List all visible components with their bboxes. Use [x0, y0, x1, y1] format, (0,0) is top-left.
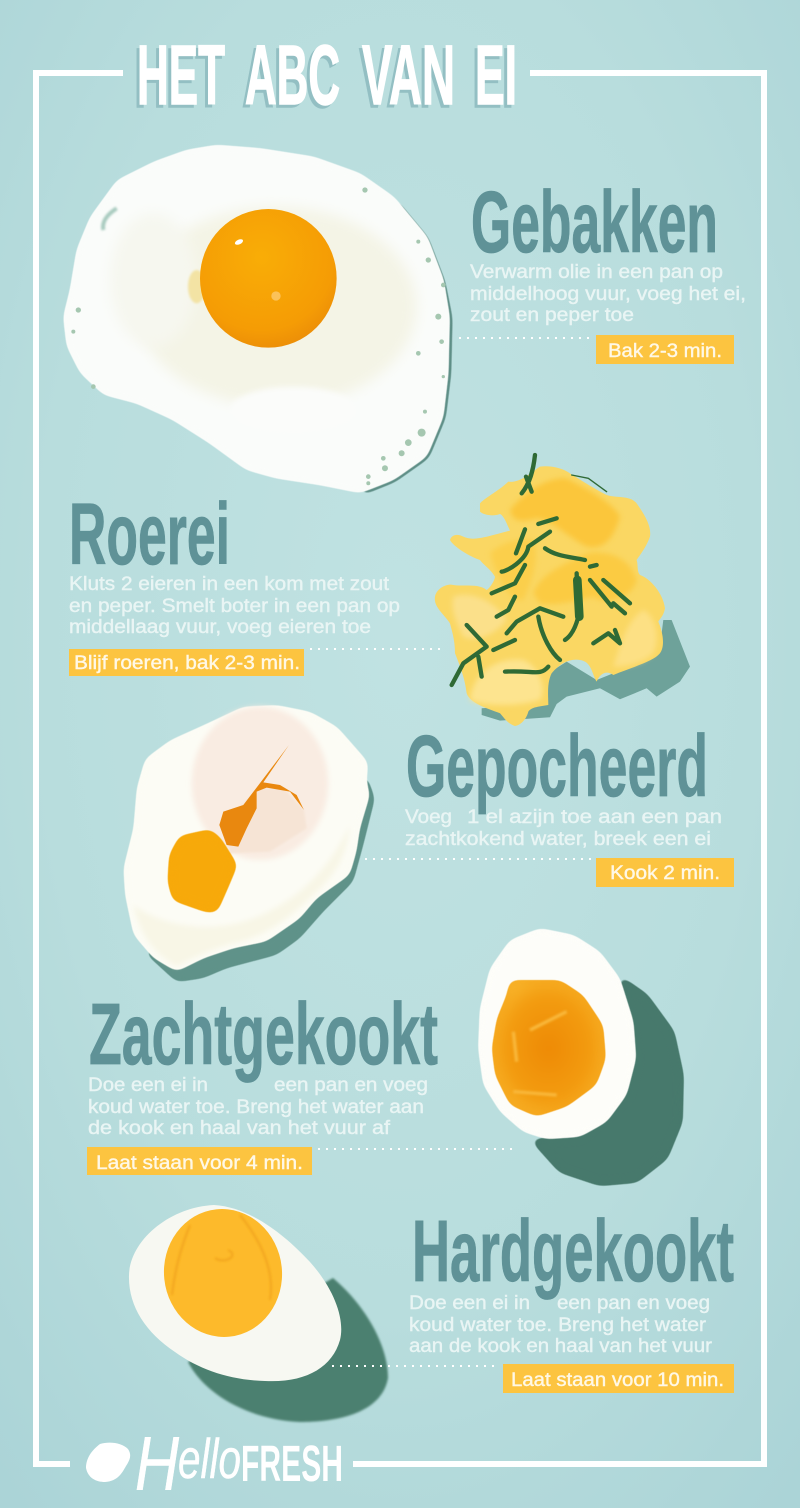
text: Hardgekookt instructions [409, 1292, 713, 1357]
text: Hardgekookt instructions: een pan en voeg [557, 1292, 710, 1314]
logo: HelloFRESH: H [135, 1422, 179, 1507]
hard yolk [158, 1203, 288, 1343]
text: Hardgekookt instructions: aan de kook en haal van het vuur [409, 1335, 713, 1357]
photo: scrambled eggs [435, 455, 690, 726]
dotted leader: Gepocheerd [365, 858, 594, 860]
text: Gebakken instructions [470, 261, 746, 326]
herbs [452, 455, 630, 685]
title: VAN [362, 28, 455, 122]
text: Zachtgekookt instructions: koud water toe. Breng het water aan [88, 1096, 424, 1118]
title: HET [137, 28, 225, 122]
text: Gebakken instructions: zout en peper toe [470, 304, 634, 326]
label: Blijf roeren: Blijf roeren, bak 2-3 min. [74, 652, 300, 674]
text: Roerei instructions [69, 573, 400, 638]
text: Zachtgekookt instructions: een pan en voeg [274, 1074, 428, 1096]
logo: HelloFRESH [86, 1422, 343, 1507]
icon: lemon [86, 1443, 130, 1482]
text: Gepocheerd instructions: zachtkokend water, breek een ei [405, 828, 711, 850]
dotted leader: Zachtgekookt [318, 1148, 512, 1150]
text: Gepocheerd instructions: 1 el azijn toe aan een pan [467, 806, 722, 828]
logo: HelloFRESH: FRESH [241, 1435, 343, 1492]
text: Gebakken instructions: Verwarm olie in een pan op [470, 261, 723, 283]
title: ABC [245, 28, 340, 122]
dotted leader: Gebakken [459, 337, 594, 339]
dotted leader: Hardgekookt [332, 1365, 494, 1367]
text: Zachtgekookt instructions: de kook en haal van het vuur af [88, 1117, 391, 1139]
label: Kook 2 min. [596, 858, 734, 887]
title: EI [475, 28, 517, 122]
dotted leader: Roerei [310, 648, 445, 650]
text: Gepocheerd instructions [405, 806, 722, 850]
label: Bak 2-3 min. [596, 335, 734, 364]
text: Hardgekookt instructions: Doe een ei in [409, 1292, 530, 1314]
heading: Zachtgekookt: Zachtgekookt [89, 986, 438, 1083]
photo: fried egg [64, 146, 452, 495]
label: Bak 2-3 min.: Bak 2-3 min. [608, 340, 722, 362]
text: Zachtgekookt instructions [88, 1074, 428, 1139]
heading: Roerei: Roerei [69, 486, 230, 583]
poached yolk [168, 830, 237, 912]
text: Roerei instructions: en peper. Smelt boter in een pan op [69, 595, 400, 617]
text: Zachtgekookt instructions: Doe een ei in [88, 1074, 208, 1096]
label: Laat staan voor 4 min. [87, 1147, 312, 1175]
photo: hard-boiled egg [129, 1203, 388, 1422]
label: Kook 2 min.: Kook 2 min. [610, 862, 720, 884]
logo: HelloFRESH: ello [178, 1427, 241, 1490]
text: Hardgekookt instructions: koud water toe. Breng het water [409, 1314, 707, 1336]
text: Gebakken instructions: middelhoog vuur, voeg het ei, [470, 283, 746, 305]
label: Laat staan voor 4 min.: Laat staan voor 4 min. [96, 1152, 303, 1174]
egg yolk [200, 209, 337, 348]
photo: poached egg [124, 706, 375, 982]
soft yolk [493, 981, 605, 1116]
text: Roerei instructions: middellaag vuur, voeg eieren toe [69, 616, 371, 638]
photo: soft-boiled egg [479, 929, 683, 1185]
label: Laat staan voor 10 min.: Laat staan voor 10 min. [511, 1369, 724, 1391]
text: Roerei instructions: Kluts 2 eieren in een kom met zout [69, 573, 390, 595]
text: Gepocheerd instructions: Voeg [405, 806, 452, 828]
label: Laat staan voor 10 min. [503, 1364, 734, 1393]
